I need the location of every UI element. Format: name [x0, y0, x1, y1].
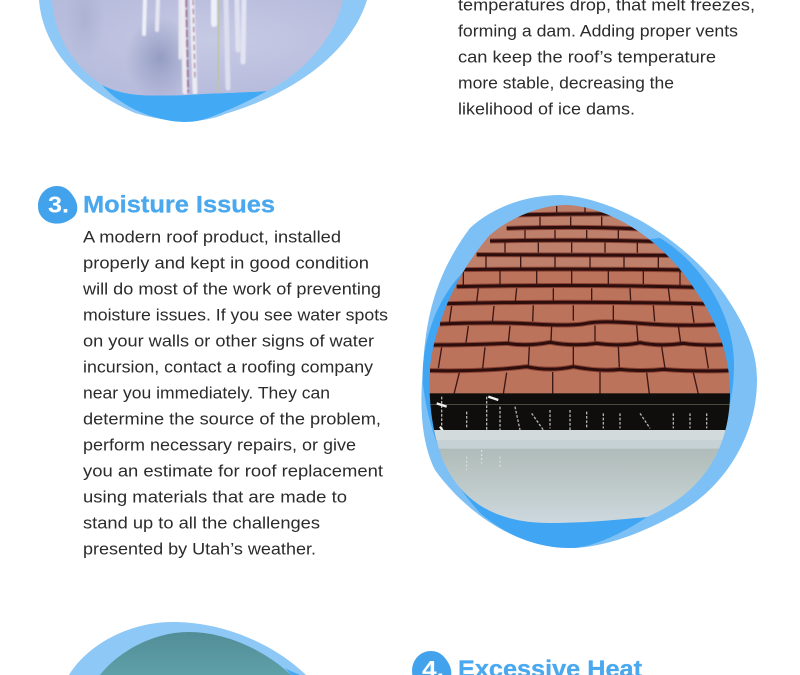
text block: ice dams continued: [458, 0, 755, 118]
tile vertical joints: [438, 206, 708, 394]
light blue blob behind icicles: [39, 0, 367, 121]
icicle photo: [52, 0, 343, 96]
darker blue blob edge: [102, 85, 267, 122]
text block: moisture issues body: incursion, contact a roofing company: [83, 358, 374, 376]
image blob: icicles: [39, 0, 367, 122]
tile row soft shadows: [430, 214, 730, 371]
text block: moisture issues body: you an estimate for roof replacement: [83, 462, 384, 480]
darker blue blob: [423, 238, 734, 548]
text block: ice dams continued: can keep the roof’s temperature: [458, 48, 716, 66]
black gutter: [420, 393, 740, 431]
text block: moisture issues body: stand up to all the challenges: [83, 514, 320, 532]
section 3 heading: [38, 186, 275, 224]
water splashes: [442, 397, 707, 457]
text block: moisture issues body: determine the source of the problem,: [83, 410, 381, 428]
text block: moisture issues body: using materials that are made to: [83, 488, 347, 506]
section 4 heading: [412, 651, 642, 675]
gutter underside: [420, 430, 740, 440]
tile field: [420, 200, 740, 397]
text block: moisture issues body: A modern roof product, installed: [83, 228, 341, 246]
text block: moisture issues body: perform necessary repairs, or give: [83, 436, 356, 454]
light blue blob: [69, 622, 306, 675]
darker blue sliver: [285, 668, 300, 675]
text block: moisture issues body: presented by Utah’s weather.: [83, 540, 316, 558]
text block: moisture issues body: on your walls or other signs of water: [83, 332, 375, 350]
teal photo: [100, 632, 291, 675]
text block: moisture issues body: [82, 228, 388, 558]
badge: number 3: [38, 186, 77, 224]
image blob: wet roof tiles: [420, 195, 757, 548]
text block: ice dams continued: likelihood of ice dams.: [458, 100, 635, 118]
roof photo: [420, 200, 740, 529]
badge: number 4: [412, 651, 451, 675]
text block: moisture issues body: properly and kept in good condition: [83, 254, 369, 272]
text block: moisture issues body: moisture issues. If you see water spots: [83, 306, 388, 324]
text block: moisture issues body: near you immediately. They can: [83, 384, 330, 402]
tile row shadows: [430, 214, 730, 371]
image blob: excessive heat: [69, 622, 306, 675]
badge: number 3: 3.: [48, 192, 69, 218]
light blue blob behind roof: [421, 195, 757, 548]
text block: ice dams continued: more stable, decreasing the: [458, 74, 674, 92]
text block: ice dams continued: forming a dam. Adding proper vents: [458, 22, 738, 40]
heading: Moisture Issues: Moisture Issues: [83, 192, 275, 218]
text block: moisture issues body: will do most of the work of preventing: [82, 280, 381, 298]
